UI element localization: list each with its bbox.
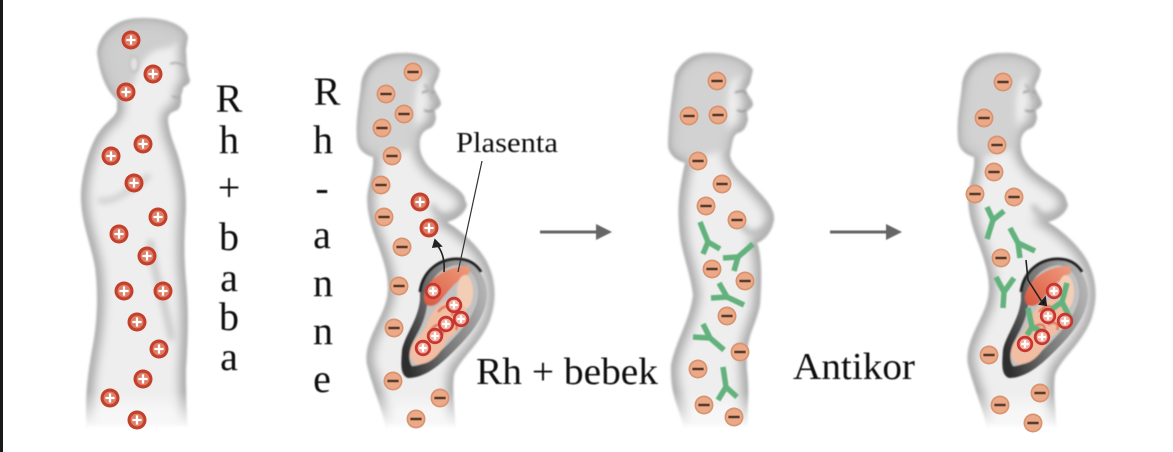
Rh positive fetal cells bbox=[416, 284, 468, 355]
label: Plasenta: Plasenta bbox=[456, 128, 559, 159]
label: Rh + bebek: Rh + bebek bbox=[476, 351, 658, 393]
vertical label: Rh + baba: + bbox=[218, 165, 240, 210]
figure: Rh positive father bbox=[80, 16, 191, 430]
vertical label: Rh - anne: - bbox=[315, 165, 329, 210]
arrow: step 2 bbox=[830, 224, 902, 240]
Rh positive cells bbox=[100, 30, 172, 430]
vertical label: Rh + baba bbox=[216, 76, 243, 379]
Rh negative cells bbox=[680, 72, 754, 426]
silhouette: man bbox=[80, 16, 191, 424]
leader line: Plasenta bbox=[458, 161, 482, 272]
vertical label: Rh + baba: h bbox=[219, 117, 239, 162]
figure: mother producing antibodies bbox=[666, 52, 776, 426]
silhouette: pregnant woman bbox=[951, 45, 1106, 437]
uterus with fetus bbox=[401, 259, 487, 378]
antibodies bbox=[693, 222, 753, 400]
vertical label: Rh - anne: a bbox=[313, 212, 331, 257]
figure: pregnant Rh negative mother bbox=[350, 45, 505, 437]
arrow: Rh positive cells leaving placenta bbox=[433, 240, 444, 272]
vertical label: Rh - anne: n bbox=[313, 308, 333, 353]
vertical label: Rh - anne: e bbox=[313, 356, 331, 401]
Rh negative cells bbox=[966, 72, 1050, 432]
vertical label: Rh + baba: a bbox=[220, 255, 238, 300]
frame line bbox=[0, 0, 3, 452]
Rh positive fetal cells bbox=[1018, 284, 1072, 351]
uterus with fetus bbox=[1002, 259, 1088, 378]
silhouette: woman bbox=[666, 52, 776, 424]
antibodies bbox=[987, 207, 1070, 335]
arrow: antibodies crossing placenta bbox=[1026, 260, 1046, 305]
vertical label: Rh - anne bbox=[313, 69, 341, 401]
silhouette: pregnant woman bbox=[350, 45, 505, 437]
Rh negative cells bbox=[372, 62, 450, 428]
figure: second pregnancy with antibodies bbox=[951, 45, 1106, 437]
vertical label: Rh + baba: a bbox=[220, 334, 238, 379]
vertical label: Rh - anne: R bbox=[314, 69, 341, 114]
vertical label: Rh + baba: R bbox=[216, 76, 243, 121]
label: Antikor: Antikor bbox=[793, 346, 915, 388]
vertical label: Rh + baba: b bbox=[219, 214, 239, 259]
vertical label: Rh - anne: h bbox=[313, 117, 333, 162]
Rh positive cells crossing to mother bbox=[410, 192, 438, 238]
arrow: step 1 bbox=[540, 224, 612, 240]
vertical label: Rh - anne: n bbox=[313, 260, 333, 305]
vertical label: Rh + baba: b bbox=[219, 294, 239, 339]
